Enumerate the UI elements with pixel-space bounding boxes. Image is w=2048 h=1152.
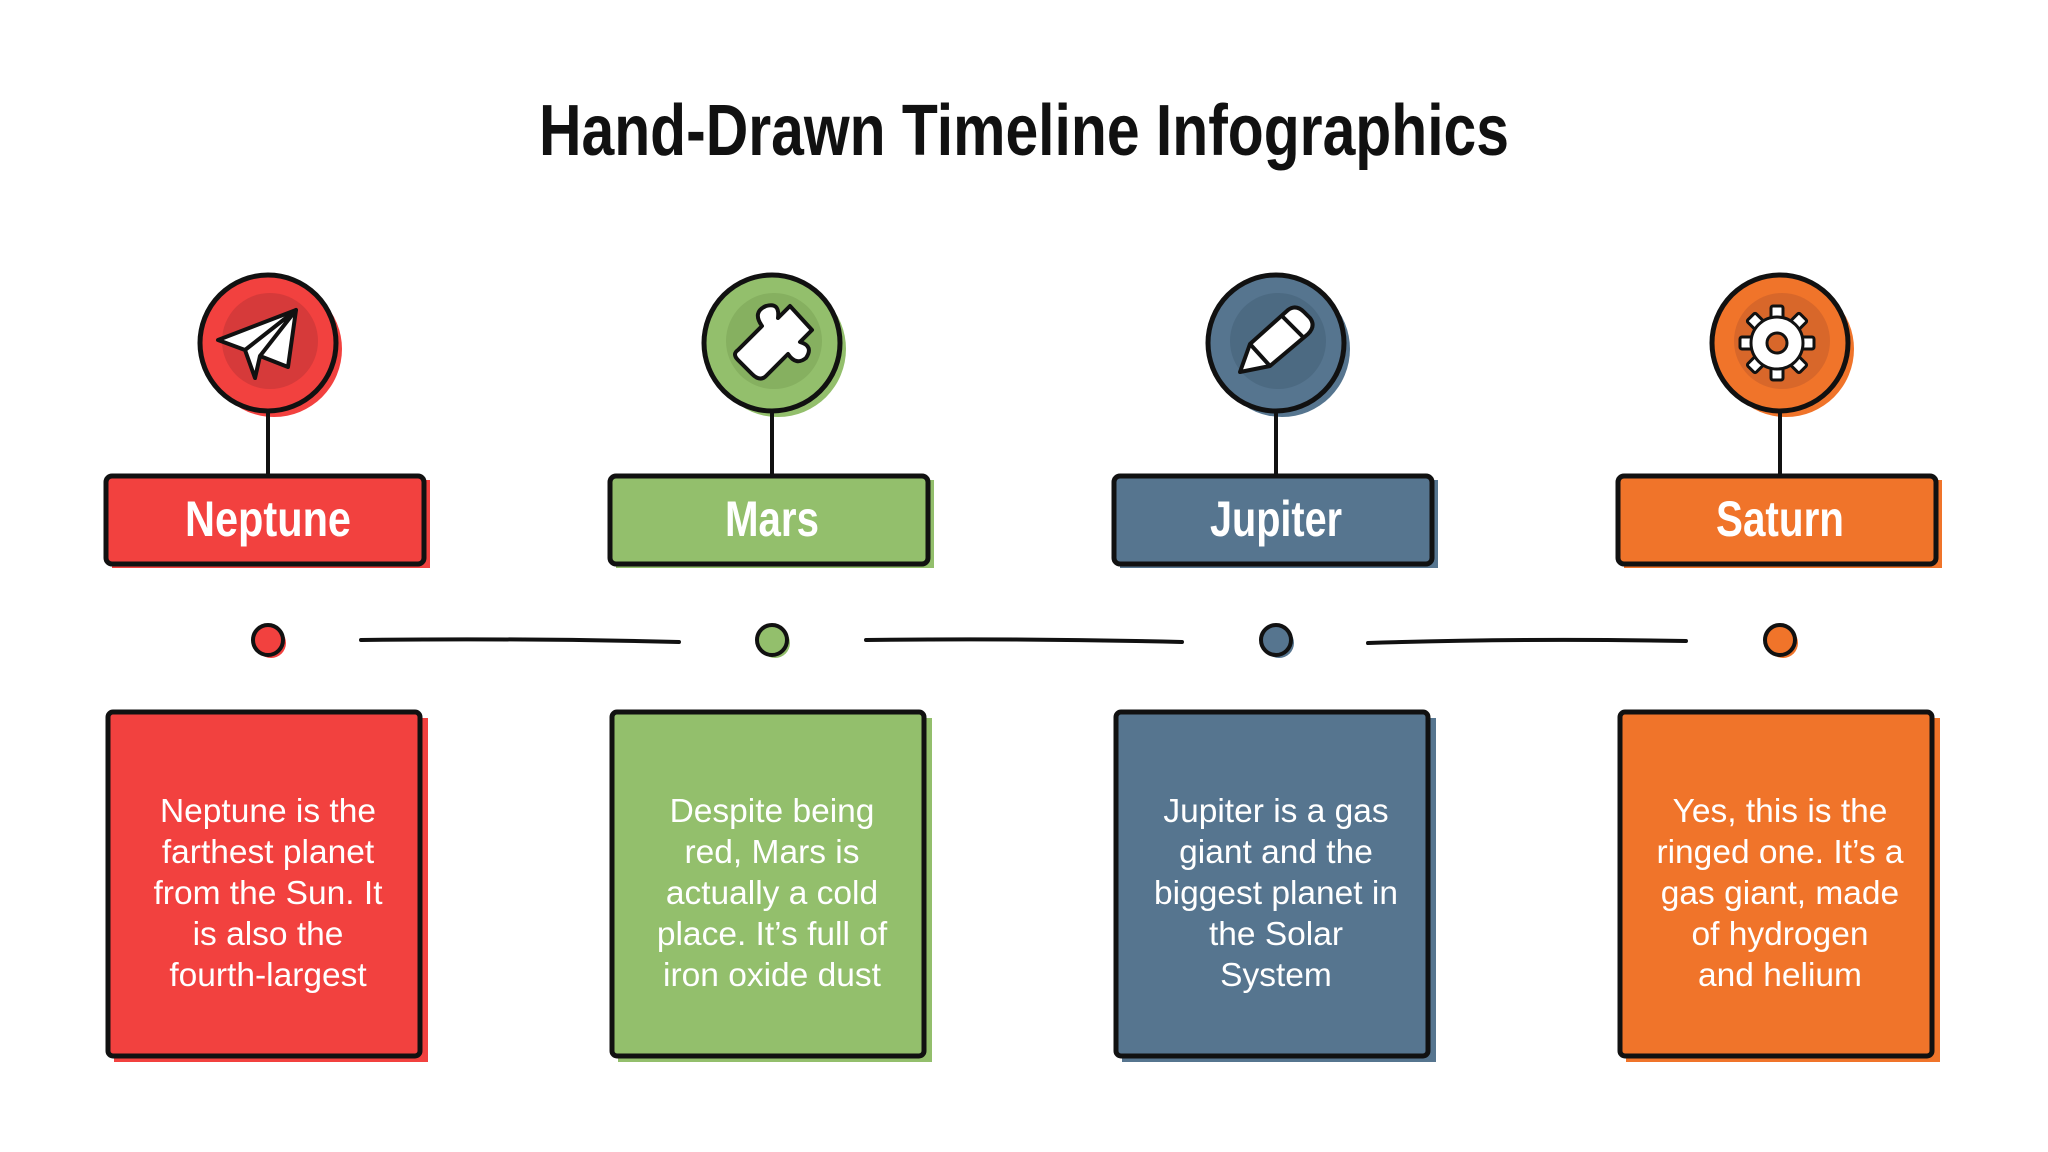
text box: Neptune: farthest planet	[162, 834, 375, 871]
text box: Saturn: gas giant, made	[1661, 875, 1899, 912]
text box: Saturn: ringed one. It’s a	[1656, 834, 1904, 871]
text box: Saturn: of hydrogen	[1692, 916, 1868, 953]
text box: Jupiter: the Solar	[1209, 916, 1343, 953]
text box: Neptune: is also the	[193, 916, 343, 953]
text box: Neptune: fourth-largest	[169, 957, 367, 994]
label: Saturn	[1618, 476, 1942, 568]
text box: Mars: actually a cold	[666, 875, 878, 912]
column: Saturn	[1618, 275, 1942, 1062]
icon: pencil	[1208, 275, 1350, 417]
label: Mars: Mars	[725, 491, 819, 547]
label: Neptune	[106, 476, 430, 568]
text box: Jupiter	[1116, 712, 1436, 1062]
text box: Saturn	[1620, 712, 1940, 1062]
icon: gear	[1712, 275, 1854, 417]
icon: puzzle	[704, 275, 846, 417]
title: Hand-Drawn Timeline Infographics	[539, 91, 1509, 171]
text box: Jupiter: giant and the	[1179, 834, 1373, 871]
text box: Jupiter: System	[1220, 957, 1332, 994]
label: Neptune: Neptune	[185, 491, 351, 547]
text box: Saturn: Yes, this is the	[1673, 793, 1887, 830]
text box: Mars: Despite being	[670, 793, 874, 830]
dot	[1261, 625, 1294, 658]
label: Jupiter: Jupiter	[1210, 491, 1342, 547]
dot	[1765, 625, 1798, 658]
text box: Saturn: and helium	[1698, 957, 1862, 994]
column: Jupiter	[1114, 275, 1438, 1062]
column: Neptune	[106, 275, 430, 1062]
text box: Jupiter: Jupiter is a gas	[1163, 793, 1389, 830]
text box: Neptune: from the Sun. It	[153, 875, 383, 912]
icon: paper plane	[200, 275, 342, 417]
label: Jupiter	[1114, 476, 1438, 568]
text box: Mars: place. It’s full of	[657, 916, 888, 953]
text box: Mars	[612, 712, 932, 1062]
timeline connectors	[361, 639, 1686, 643]
label: Saturn: Saturn	[1716, 491, 1844, 547]
text box: Mars: iron oxide dust	[663, 957, 882, 994]
dot	[757, 625, 790, 658]
text box: Neptune	[108, 712, 428, 1062]
label: Mars	[610, 476, 934, 568]
text box: Neptune: Neptune is the	[160, 793, 376, 830]
text box: Jupiter: biggest planet in	[1154, 875, 1398, 912]
text box: Mars: red, Mars is	[685, 834, 859, 871]
column: Mars	[610, 275, 934, 1062]
dot	[253, 625, 286, 658]
